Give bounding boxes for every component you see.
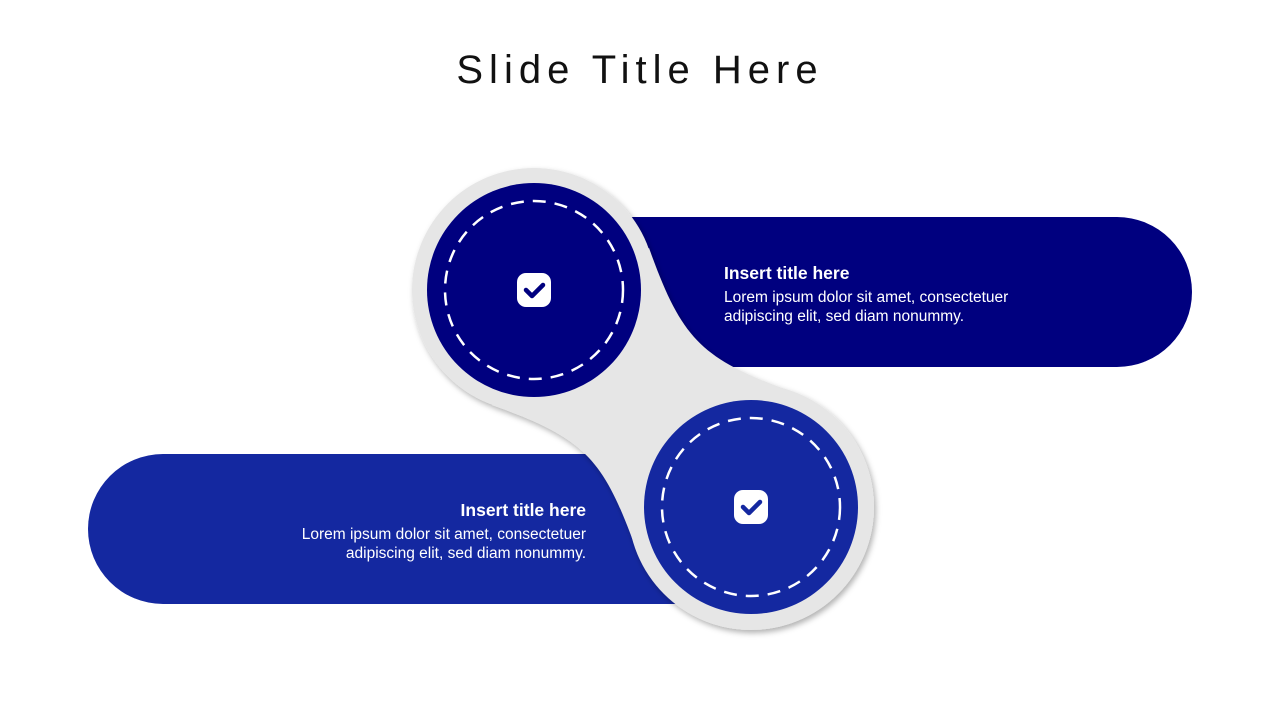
bar: top: [600, 217, 1192, 367]
text block: top: Insert title here: [724, 263, 849, 283]
icon: check top: [517, 273, 551, 307]
text block: top: Lorem ipsum dolor sit amet, consectetuer: [724, 289, 1008, 306]
bar: bottom: [88, 454, 710, 604]
text block: bottom: Lorem ipsum dolor sit amet, consectetuer: [302, 526, 586, 543]
circle: bottom: [644, 400, 858, 614]
text block: top: [724, 263, 1008, 325]
circle: top: [427, 183, 641, 397]
text block: bottom: [302, 500, 586, 562]
text block: top: adipiscing elit, sed diam nonummy.: [724, 308, 964, 325]
text block: bottom: adipiscing elit, sed diam nonummy.: [346, 545, 586, 562]
icon: check bottom: [734, 490, 768, 524]
connector gray shape: [412, 168, 874, 630]
text block: bottom: Insert title here: [461, 500, 586, 520]
title: Slide Title Here: [456, 48, 824, 92]
